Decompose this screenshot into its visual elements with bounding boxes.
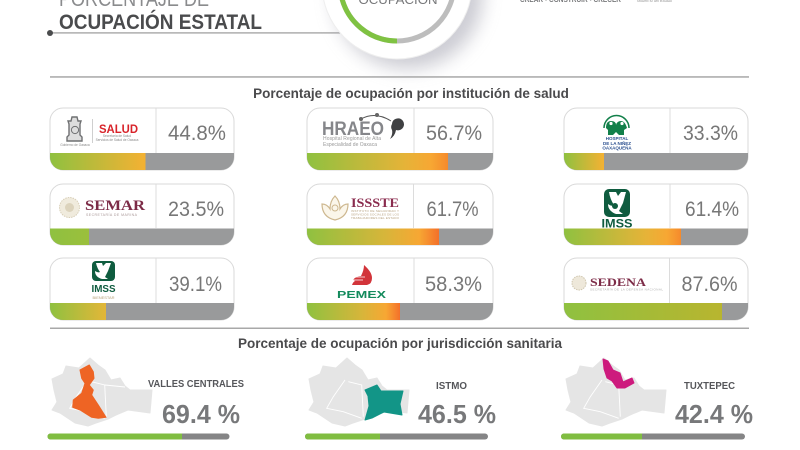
map: Valles Centrales [52, 358, 152, 426]
panel: SALUD 44.8% [50, 108, 234, 170]
logo: SEMAR: SEMAR [85, 198, 146, 214]
logo: PEMEX [337, 265, 386, 301]
panel: SEMAR 23.5%: 23.5% [168, 198, 224, 221]
panel: Valles Centrales [48, 358, 244, 440]
logo: SALUD: Gobierno de Oaxaca [60, 143, 90, 147]
map: Istmo [309, 358, 409, 426]
panel: Tuxtepec: 42.4 % [675, 399, 753, 429]
panel: ISSSTE 61.7% [307, 184, 493, 246]
logo: Hospital de la Niñez: OAXAQUEÑA [602, 144, 632, 150]
logo: ISSSTE: INSTITUTO DE SEGURIDAD Y [351, 209, 399, 213]
map: Tuxtepec [566, 358, 666, 426]
panel: SEMAR 23.5% [50, 184, 234, 246]
logo: Hospital de la Niñez [602, 116, 632, 150]
panel: Hospital de la Niñez 33.3%: 33.3% [683, 122, 738, 145]
panel: Tuxtepec: TUXTEPEC [684, 381, 735, 392]
panel: Istmo: ISTMO [436, 381, 467, 392]
panel: IMSS Bienestar 39.1% [50, 258, 234, 320]
logo: SALUD: Secretaría de Salud [103, 134, 131, 138]
logo: SALUD [60, 117, 139, 147]
panel: HRAEO 56.7% [307, 108, 493, 170]
logo: HRAEO: Especialidad de Oaxaca [323, 142, 377, 148]
title [59, 0, 262, 34]
panel: IMSS Bienestar 39.1%: 39.1% [169, 273, 222, 296]
logo: IMSS Bienestar: IMSS [92, 283, 116, 295]
logo: SEDENA: SECRETARÍA DE LA DEFENSA NACIONAL [590, 288, 663, 292]
progress bar [48, 434, 230, 440]
panel: PEMEX 58.3%: 58.3% [425, 273, 482, 296]
panel: SEDENA 87.6%: 87.6% [682, 273, 738, 296]
logo: SEMAR: SECRETARÍA DE MARINA [86, 213, 138, 217]
heading: health jurisdictions: Porcentaje de ocupación por jurisdicción sanitaria [238, 336, 563, 351]
logo: ISSSTE: TRABAJADORES DEL ESTADO [351, 216, 400, 220]
panel: Istmo: 46.5 % [418, 399, 496, 429]
panel: SEDENA 87.6% [564, 258, 748, 320]
logo: IMSS Bienestar: BIENESTAR [92, 295, 115, 300]
panel: ISSSTE 61.7%: 61.7% [426, 198, 478, 221]
logo: Hospital de la Niñez: HOSPITAL [606, 136, 628, 141]
logo: SALUD: SALUD [99, 122, 138, 136]
logo: HRAEO: HRAEO [322, 119, 384, 140]
logo: PEMEX: PEMEX [337, 290, 386, 301]
panel: Hospital de la Niñez 33.3% [564, 108, 748, 170]
logo: IMSS Bienestar [92, 261, 116, 300]
panel: IMSS 61.4%: 61.4% [685, 198, 739, 221]
panel: Valles Centrales: VALLES CENTRALES [148, 379, 244, 390]
logo: HRAEO [322, 113, 404, 148]
logo: SEDENA: SEDENA [590, 275, 646, 289]
logo: IMSS [602, 189, 632, 230]
logo: ISSSTE: ISSSTE [351, 195, 399, 210]
logo: SEDENA [572, 275, 663, 292]
progress bar [305, 434, 488, 440]
logo: IMSS: IMSS [602, 216, 632, 230]
panel: Tuxtepec [561, 358, 753, 440]
panel: SALUD 44.8%: 44.8% [168, 122, 226, 145]
panel: PEMEX 58.3% [307, 258, 493, 320]
panel: Istmo [305, 358, 496, 440]
logo: SEMAR [60, 198, 146, 218]
panel: IMSS 61.4% [564, 184, 748, 246]
logo: HRAEO: Hospital Regional de Alta [323, 136, 381, 142]
panel: HRAEO 56.7%: 56.7% [426, 122, 482, 145]
heading: institutions: Porcentaje de ocupación por institución de salud [253, 86, 569, 101]
progress bar [561, 434, 745, 440]
logo: ISSSTE [322, 195, 400, 220]
logo: ISSSTE: SERVICIOS SOCIALES DE LOS [351, 212, 399, 216]
panel: Valles Centrales: 69.4 % [162, 399, 240, 429]
logo: SALUD: Servicios de Salud de Oaxaca [96, 138, 139, 142]
gauge: state occupancy [322, 0, 483, 69]
title rule with dot [47, 30, 340, 36]
title: OCUPACIÓN ESTATAL [59, 10, 262, 34]
logo: Hospital de la Niñez: DE LA NIÑEZ [603, 140, 631, 146]
